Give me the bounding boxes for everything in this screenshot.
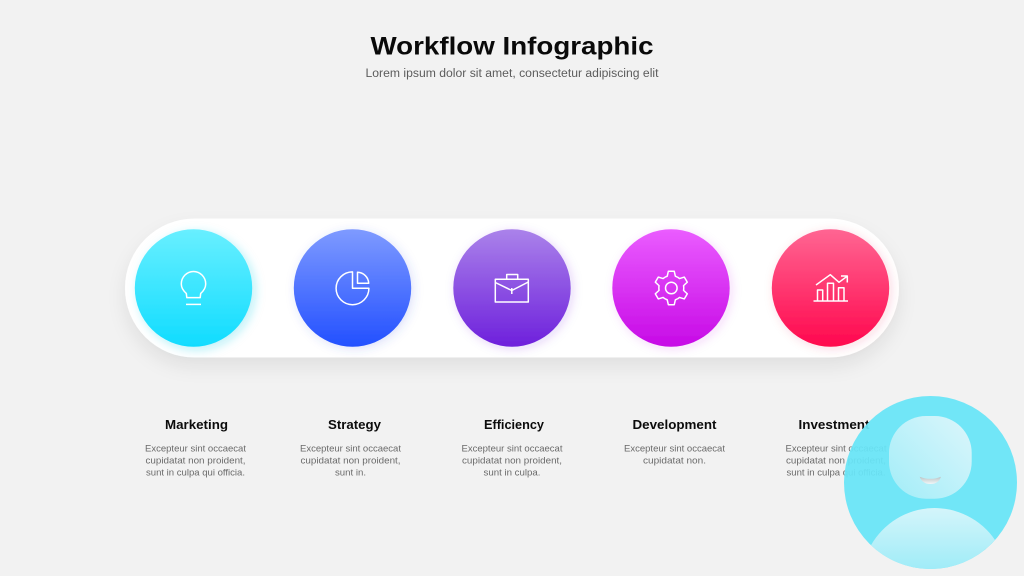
text block: Efficiency: cupidatat non proident, (462, 454, 562, 466)
panel: white pill track (125, 218, 899, 358)
text block: Strategy: sunt in. (335, 467, 366, 478)
text block: Development: Development (632, 418, 717, 432)
icon: pie chart (336, 272, 369, 305)
step circle: Investment (772, 229, 889, 347)
text block: Investment: Investment (798, 418, 870, 432)
text block: Marketing: cupidatat non proident, (146, 454, 246, 466)
text block: Efficiency: Excepteur sint occaecat (462, 443, 563, 454)
text block: Development: cupidatat non. (643, 454, 706, 466)
icon: growth chart (814, 275, 848, 301)
text block: Marketing: sunt in culpa qui officia. (146, 467, 245, 478)
step circle: Strategy (294, 229, 411, 347)
text block: Efficiency (462, 418, 563, 478)
text block: Marketing (145, 418, 246, 478)
icon: light bulb (181, 272, 206, 304)
avatar smile (920, 477, 941, 484)
text block: Investment: cupidatat non proident, (786, 454, 886, 466)
text block: Strategy: Excepteur sint occaecat (300, 443, 401, 454)
text block: Efficiency: Efficiency (484, 418, 544, 432)
avatar body (871, 508, 995, 569)
text block: Strategy: cupidatat non proident, (300, 454, 400, 466)
avatar: presenter overlay (844, 396, 1017, 569)
step circle: Development (612, 229, 730, 347)
subtitle: Lorem ipsum dolor sit amet, consectetur adipiscing elit (366, 68, 659, 80)
text block: Efficiency: sunt in culpa. (484, 467, 540, 478)
avatar head (889, 416, 972, 499)
text block: Marketing: Marketing (165, 418, 228, 432)
text block: Strategy (300, 418, 401, 478)
text block: Development (624, 418, 725, 466)
step circle: Efficiency (453, 229, 571, 347)
text block: Investment: Excepteur sint occaecat (786, 443, 887, 454)
icon: gear (654, 271, 689, 305)
text block: Investment (786, 418, 887, 478)
step circle: Marketing (135, 229, 252, 347)
text block: Marketing: Excepteur sint occaecat (145, 443, 246, 454)
icon: briefcase (495, 274, 528, 302)
text block: Development: Excepteur sint occaecat (624, 443, 725, 454)
text block: Investment: sunt in culpa qui officia. (786, 467, 886, 478)
text block: Strategy: Strategy (328, 418, 381, 432)
title: Workflow Infographic (370, 32, 654, 60)
